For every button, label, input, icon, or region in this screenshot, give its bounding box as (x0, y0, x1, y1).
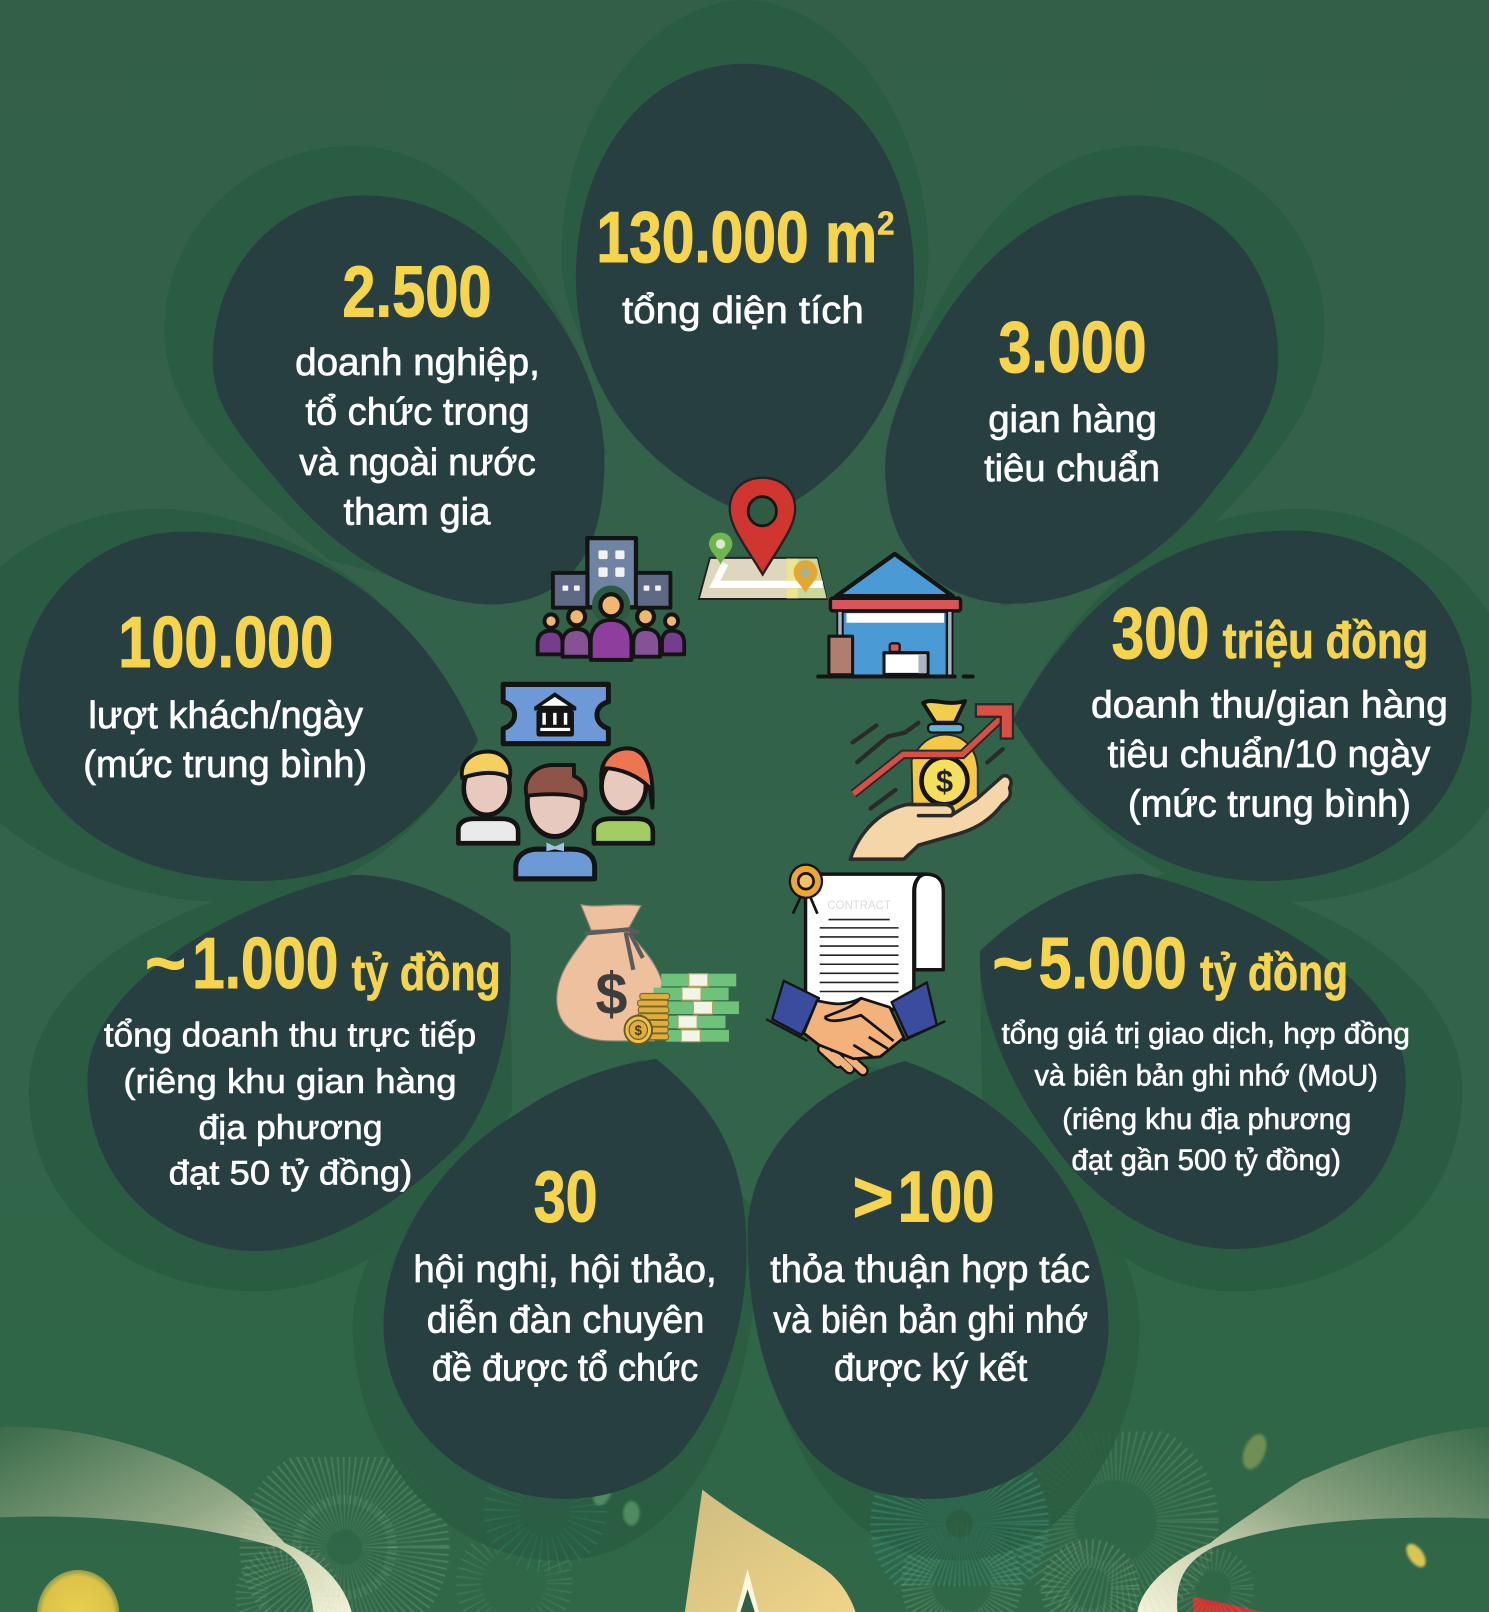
icon: three visitors (458, 748, 653, 879)
number: 2.500 (342, 253, 492, 333)
label: tổng giá trị giao dịch, hợp đồng (1002, 1017, 1410, 1050)
petal shape (980, 874, 1406, 1249)
number: 300 (1112, 594, 1209, 674)
number: 100 (898, 1157, 994, 1237)
label: doanh thu/gian hàng (1091, 685, 1448, 727)
panel: visitors (19, 532, 478, 881)
label: (riêng khu địa phương (1062, 1103, 1351, 1136)
label: tổ chức trong (305, 392, 530, 434)
icon: exhibition booth (818, 554, 973, 676)
label: tổng doanh thu trực tiếp (104, 1017, 476, 1055)
label: đạt 50 tỷ đồng) (169, 1154, 412, 1192)
dark spike (740, 1589, 755, 1612)
label (413, 1249, 717, 1390)
number: 100.000 (118, 603, 333, 683)
label: (mức trung bình) (1128, 783, 1411, 825)
label: doanh nghiệp, (295, 342, 540, 384)
label: và biên bản ghi nhớ (MoU) (1034, 1060, 1378, 1093)
label (83, 695, 367, 786)
label: (riêng khu gian hàng (123, 1063, 457, 1101)
bottom festival artwork (0, 1427, 1489, 1612)
unit: triệu đồng (1223, 611, 1428, 669)
label: (mức trung bình) (83, 744, 367, 786)
white spike (736, 1569, 759, 1612)
label (1002, 1017, 1410, 1177)
label: tiêu chuẩn/10 ngày (1107, 734, 1430, 776)
label: thỏa thuận hợp tác (770, 1249, 1090, 1291)
icon: museum ticket (503, 684, 608, 744)
label (295, 342, 540, 533)
petal shape (1013, 530, 1472, 881)
label: lượt khách/ngày (88, 695, 363, 737)
fireworks left (251, 1473, 559, 1612)
petal shape (19, 532, 478, 881)
icon: money growth in hand (850, 701, 1013, 859)
number: 1.000 (192, 924, 338, 1004)
label: gian hàng (988, 399, 1157, 441)
icon: contract and handshake: CONTRACT (827, 899, 891, 912)
label (1091, 685, 1448, 825)
icon: money growth in hand: $ (936, 763, 953, 799)
panel: businesses (213, 195, 604, 605)
panel: agreements (748, 1061, 1109, 1499)
label: được ký kết (834, 1348, 1028, 1390)
label: tổng diện tích (622, 290, 864, 332)
gold centre peak (685, 1490, 856, 1612)
petal shape (748, 1061, 1109, 1499)
petal shape (576, 64, 914, 519)
label: đạt gần 500 tỷ đồng) (1072, 1144, 1341, 1177)
petal shape (213, 195, 604, 605)
red flag (1193, 1597, 1265, 1612)
panel: total transactions (980, 874, 1410, 1249)
petal shape (87, 875, 511, 1251)
label (770, 1249, 1090, 1390)
icon: buildings and crowd (538, 538, 684, 660)
fireworks right (916, 1450, 1242, 1612)
unit: tỷ đồng (352, 943, 501, 1001)
number: 130.000 m (596, 198, 877, 278)
small yellow leaf (1402, 1540, 1430, 1571)
petal shape (885, 195, 1278, 604)
label (984, 399, 1160, 490)
icon: money bag with coins and bills: $ (635, 1023, 643, 1038)
panel: booths (885, 195, 1278, 604)
label: đề được tổ chức (432, 1348, 698, 1390)
label: hội nghị, hội thảo, (413, 1249, 717, 1291)
label: tiêu chuẩn (984, 448, 1160, 490)
number: 30 (534, 1157, 597, 1237)
label: và ngoài nước (299, 442, 536, 484)
olive leaf (1238, 1431, 1271, 1473)
blobs on halo (589, 1477, 640, 1526)
panel: total area (576, 64, 914, 519)
central icons (458, 478, 1013, 1071)
panel: conferences (384, 1059, 747, 1499)
label: diễn đàn chuyên (427, 1298, 704, 1341)
label: tham gia (343, 491, 491, 533)
teal firework on halo (502, 1468, 1011, 1575)
number tilde: ~ (992, 924, 1033, 1004)
superscript: 2 (877, 204, 895, 241)
number: 5.000 (1039, 924, 1187, 1004)
icon: money bag with coins and bills (557, 905, 739, 1044)
icon: contract and handshake (766, 865, 945, 1071)
label: và biên bản ghi nhớ (773, 1299, 1088, 1341)
panel: revenue per booth (1013, 530, 1472, 881)
label (104, 1017, 476, 1192)
petal shape (384, 1059, 747, 1499)
number: 3.000 (998, 308, 1147, 388)
right light swoosh (1137, 1427, 1489, 1612)
number sign: > (852, 1157, 894, 1237)
unit: tỷ đồng (1200, 943, 1348, 1001)
number tilde: ~ (145, 924, 186, 1004)
panel: direct revenue (87, 875, 511, 1251)
left light swoosh (0, 1427, 352, 1612)
yellow balloon (37, 1570, 119, 1612)
icon: money bag with coins and bills: $ (596, 961, 627, 1027)
label: địa phương (198, 1109, 383, 1147)
icon: map pin (699, 478, 827, 599)
